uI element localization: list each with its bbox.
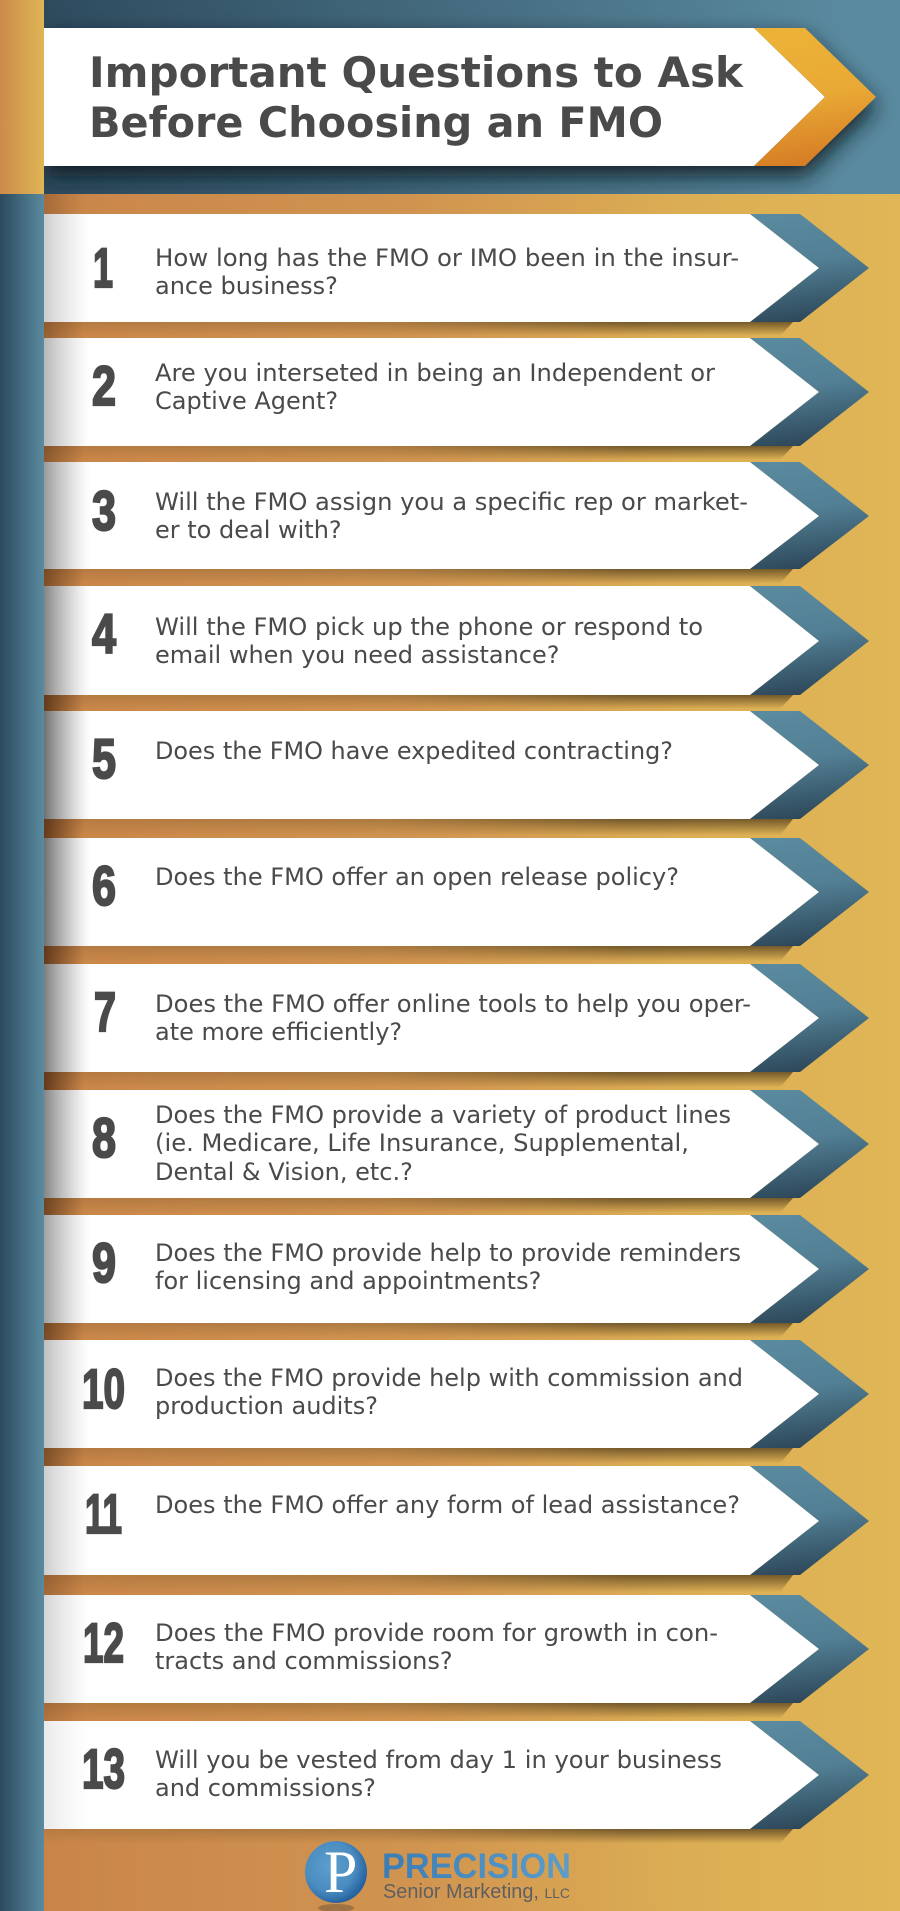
question text 3: er to deal with? xyxy=(155,516,342,544)
number 4: 4 xyxy=(92,602,116,665)
question row 9 xyxy=(44,1215,869,1340)
question row 5 xyxy=(44,711,869,838)
question row 10 xyxy=(44,1340,869,1466)
question text 13: and commissions? xyxy=(155,1774,376,1802)
question text 7: Does the FMO offer online tools to help you oper- xyxy=(155,990,751,1018)
title: Important Questions to Ask xyxy=(89,48,744,97)
question text 1: How long has the FMO or IMO been in the insur- xyxy=(155,244,739,272)
question row 1 xyxy=(44,194,869,338)
number 5: 5 xyxy=(92,727,116,790)
question text 4: email when you need assistance? xyxy=(155,641,560,669)
header chevron xyxy=(754,28,876,166)
title: Before Choosing an FMO xyxy=(89,98,663,147)
number 2: 2 xyxy=(92,354,116,417)
question text 2: Captive Agent? xyxy=(155,387,338,415)
header banner xyxy=(44,28,876,176)
left strip xyxy=(0,194,44,1911)
question text 9: Does the FMO provide help to provide reminders xyxy=(155,1239,741,1267)
question row 4 xyxy=(44,586,869,711)
number 1: 1 xyxy=(93,236,113,299)
question text 11: Does the FMO offer any form of lead assistance? xyxy=(155,1491,740,1519)
logo ball xyxy=(305,1841,367,1903)
left strip top xyxy=(0,0,44,194)
question text 8: Dental & Vision, etc.? xyxy=(155,1158,413,1186)
question row 13 xyxy=(44,1721,869,1846)
question text 10: production audits? xyxy=(155,1392,378,1420)
question row 7 xyxy=(44,964,869,1090)
header white arrow xyxy=(44,28,825,166)
logo tagline: Senior Marketing, LLC xyxy=(383,1881,570,1903)
question text 12: Does the FMO provide room for growth in con- xyxy=(155,1619,718,1647)
question row 3 xyxy=(44,462,869,586)
number 6: 6 xyxy=(92,854,116,917)
number 13: 13 xyxy=(82,1737,125,1800)
question row 11 xyxy=(44,1466,869,1595)
question text 8: Does the FMO provide a variety of product lines xyxy=(155,1101,731,1129)
number 3: 3 xyxy=(92,479,116,542)
number 12: 12 xyxy=(83,1611,124,1674)
number 7: 7 xyxy=(94,980,116,1043)
number 10: 10 xyxy=(82,1357,125,1420)
question text 13: Will you be vested from day 1 in your business xyxy=(155,1746,722,1774)
question text 5: Does the FMO have expedited contracting? xyxy=(155,737,673,765)
question text 10: Does the FMO provide help with commission and xyxy=(155,1364,743,1392)
logo wordmark: PRECISION xyxy=(382,1847,571,1886)
question text 9: for licensing and appointments? xyxy=(155,1267,541,1295)
number 11: 11 xyxy=(85,1482,122,1545)
question row 2 xyxy=(44,338,869,462)
logo letter P: P xyxy=(324,1839,357,1905)
question text 2: Are you interseted in being an Independent or xyxy=(155,359,715,387)
question text 8: (ie. Medicare, Life Insurance, Supplemental, xyxy=(155,1129,689,1157)
question text 12: tracts and commissions? xyxy=(155,1647,453,1675)
number 8: 8 xyxy=(92,1106,116,1169)
question text 3: Will the FMO assign you a specific rep or market- xyxy=(155,488,748,516)
question text 7: ate more efficiently? xyxy=(155,1018,402,1046)
number 9: 9 xyxy=(92,1231,116,1294)
header band xyxy=(44,0,900,194)
question row 8 xyxy=(44,1090,869,1215)
question row 6 xyxy=(44,838,869,964)
question text 1: ance business? xyxy=(155,272,338,300)
question text 4: Will the FMO pick up the phone or respond to xyxy=(155,613,703,641)
logo xyxy=(305,1839,571,1911)
question text 6: Does the FMO offer an open release policy? xyxy=(155,863,679,891)
question row 12 xyxy=(44,1595,869,1721)
